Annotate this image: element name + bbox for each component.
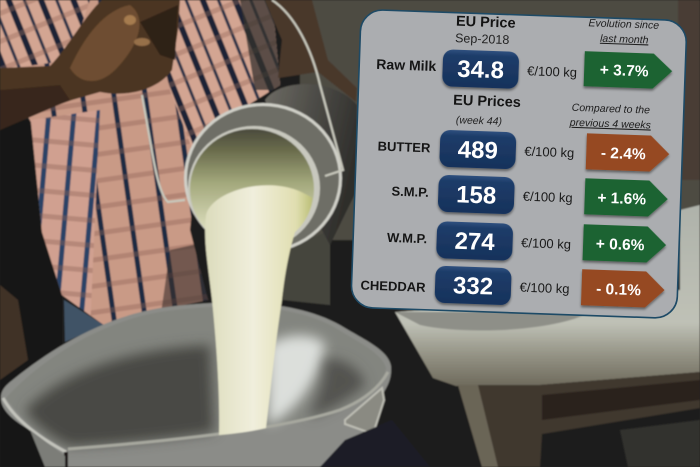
- row: W.M.P.: W.M.P.: [387, 230, 427, 246]
- person's other arm: [265, 0, 357, 102]
- panel: EU milk and dairy prices: [351, 9, 687, 319]
- row: S.M.P.: S.M.P.: [391, 184, 429, 200]
- row: Raw Milk: + 3.7%: [600, 62, 649, 80]
- plaid shirt: [0, 0, 290, 330]
- note: compared to the previous 4 weeks: [569, 102, 652, 132]
- row: CHEDDAR: [360, 262, 665, 311]
- back wall: [283, 0, 700, 305]
- can rim and opening: [184, 103, 342, 253]
- row: BUTTER: BUTTER: [377, 139, 431, 155]
- pouring milk stream: [205, 185, 312, 435]
- sub-heading: date: Sep-2018: [455, 31, 510, 47]
- arm and hand: [0, 0, 180, 130]
- row: CHEDDAR: €/100 kg: [519, 280, 570, 296]
- row: S.M.P.: + 1.6%: [597, 190, 647, 208]
- row: Raw Milk: Raw Milk: [376, 56, 437, 74]
- row: W.M.P.: + 0.6%: [595, 236, 645, 254]
- heading: EU Prices: EU Prices: [453, 93, 521, 111]
- row: W.M.P.: 274: [454, 228, 496, 256]
- row: W.M.P.: €/100 kg: [521, 235, 571, 252]
- dark clothing left and patterned fabric: [0, 0, 62, 467]
- jeans: [64, 300, 104, 342]
- row: BUTTER: [377, 126, 670, 175]
- row: CHEDDAR: - 0.1%: [596, 281, 641, 299]
- panel background: [351, 9, 687, 319]
- can handles: [142, 0, 343, 202]
- table with cloth and wooden frame: [395, 205, 700, 467]
- row: BUTTER: €/100 kg: [524, 144, 574, 160]
- row: BUTTER: 489: [457, 136, 498, 165]
- note: compared to the previous 4 weeks: previous 4 weeks: [569, 117, 652, 132]
- row: Raw Milk: 34.8: [457, 56, 504, 84]
- row: CHEDDAR: 332: [453, 272, 494, 301]
- milk can body: [265, 84, 357, 245]
- note: evolution since last month: Evolution since: [588, 17, 659, 32]
- note: evolution since last month: last month: [600, 33, 649, 46]
- sub-heading: week: (week 44): [456, 114, 502, 128]
- row: S.M.P.: 158: [456, 181, 497, 210]
- row: S.M.P.: €/100 kg: [523, 189, 573, 205]
- metal bowl: [1, 303, 430, 467]
- row: W.M.P.: [386, 217, 667, 266]
- row: BUTTER: - 2.4%: [601, 145, 646, 163]
- note: compared to the previous 4 weeks: Compared to the: [572, 102, 650, 117]
- row: CHEDDAR: CHEDDAR: [360, 278, 426, 295]
- row: Raw Milk: €/100 kg: [527, 63, 577, 80]
- heading: EU Price: EU Price: [456, 14, 516, 32]
- row: S.M.P.: [391, 172, 668, 220]
- row: Raw Milk: [376, 44, 673, 94]
- note: evolution since last month: [588, 17, 659, 47]
